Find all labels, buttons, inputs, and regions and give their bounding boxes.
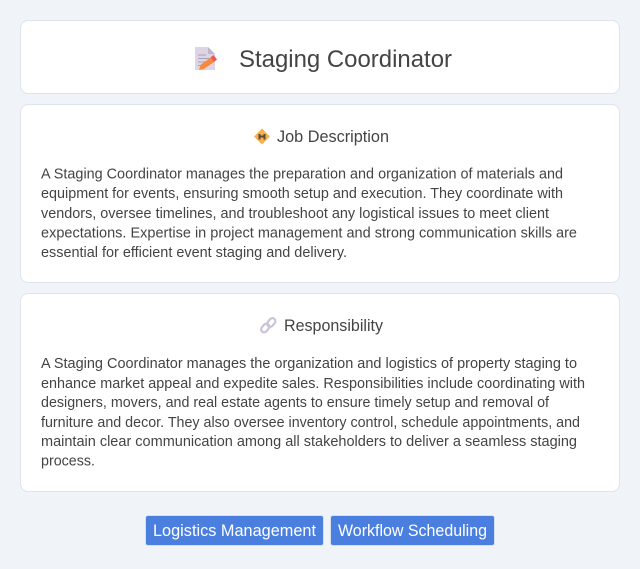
text block: job description: expectations. Expertise in project management and strong communication skills are xyxy=(41,226,577,242)
text block: responsibility: maintain clear communication among all stakeholders to deliver a seamless staging xyxy=(41,434,577,450)
text block: responsibility: furniture and decor. They also oversee inventory control, schedule appointments, and xyxy=(41,415,580,431)
heading: job description: Job Description xyxy=(277,128,389,146)
text block: responsibility: A Staging Coordinator manages the organization and logistics of property staging to xyxy=(41,356,577,372)
icon: diamond road sign xyxy=(254,128,270,144)
panel: job description card xyxy=(20,104,620,283)
text block: job description: vendors, oversee timelines, and troubleshoot any logistical issues to meet client xyxy=(41,206,549,222)
text block: responsibility: process. xyxy=(41,454,95,470)
label: logistics management: Logistics Management xyxy=(153,522,316,540)
label: workflow scheduling: Workflow Scheduling xyxy=(338,522,487,540)
icon: chain link xyxy=(260,317,277,334)
button: workflow scheduling background xyxy=(330,515,495,546)
text block: job description: A Staging Coordinator manages the preparation and organization of materials and xyxy=(41,166,563,182)
text block: job description xyxy=(41,166,577,261)
text block: job description: essential for efficient event staging and delivery. xyxy=(41,245,347,261)
heading: responsibility: Responsibility xyxy=(284,317,384,335)
text block: responsibility: enhance market appeal and expedite sales. Responsibilities include coordinating with xyxy=(41,376,585,392)
panel: responsibility card xyxy=(20,293,620,492)
text block: responsibility xyxy=(41,356,585,470)
panel: title card xyxy=(20,20,620,94)
text block: job description: equipment for events, ensuring smooth setup and execution. They coordinate with xyxy=(41,186,563,202)
icon: document with pencil xyxy=(195,47,217,70)
title: Staging Coordinator xyxy=(239,46,452,73)
button: logistics management background xyxy=(145,515,324,546)
text block: responsibility: designers, movers, and real estate agents to ensure timely setup and removal of xyxy=(41,395,550,411)
